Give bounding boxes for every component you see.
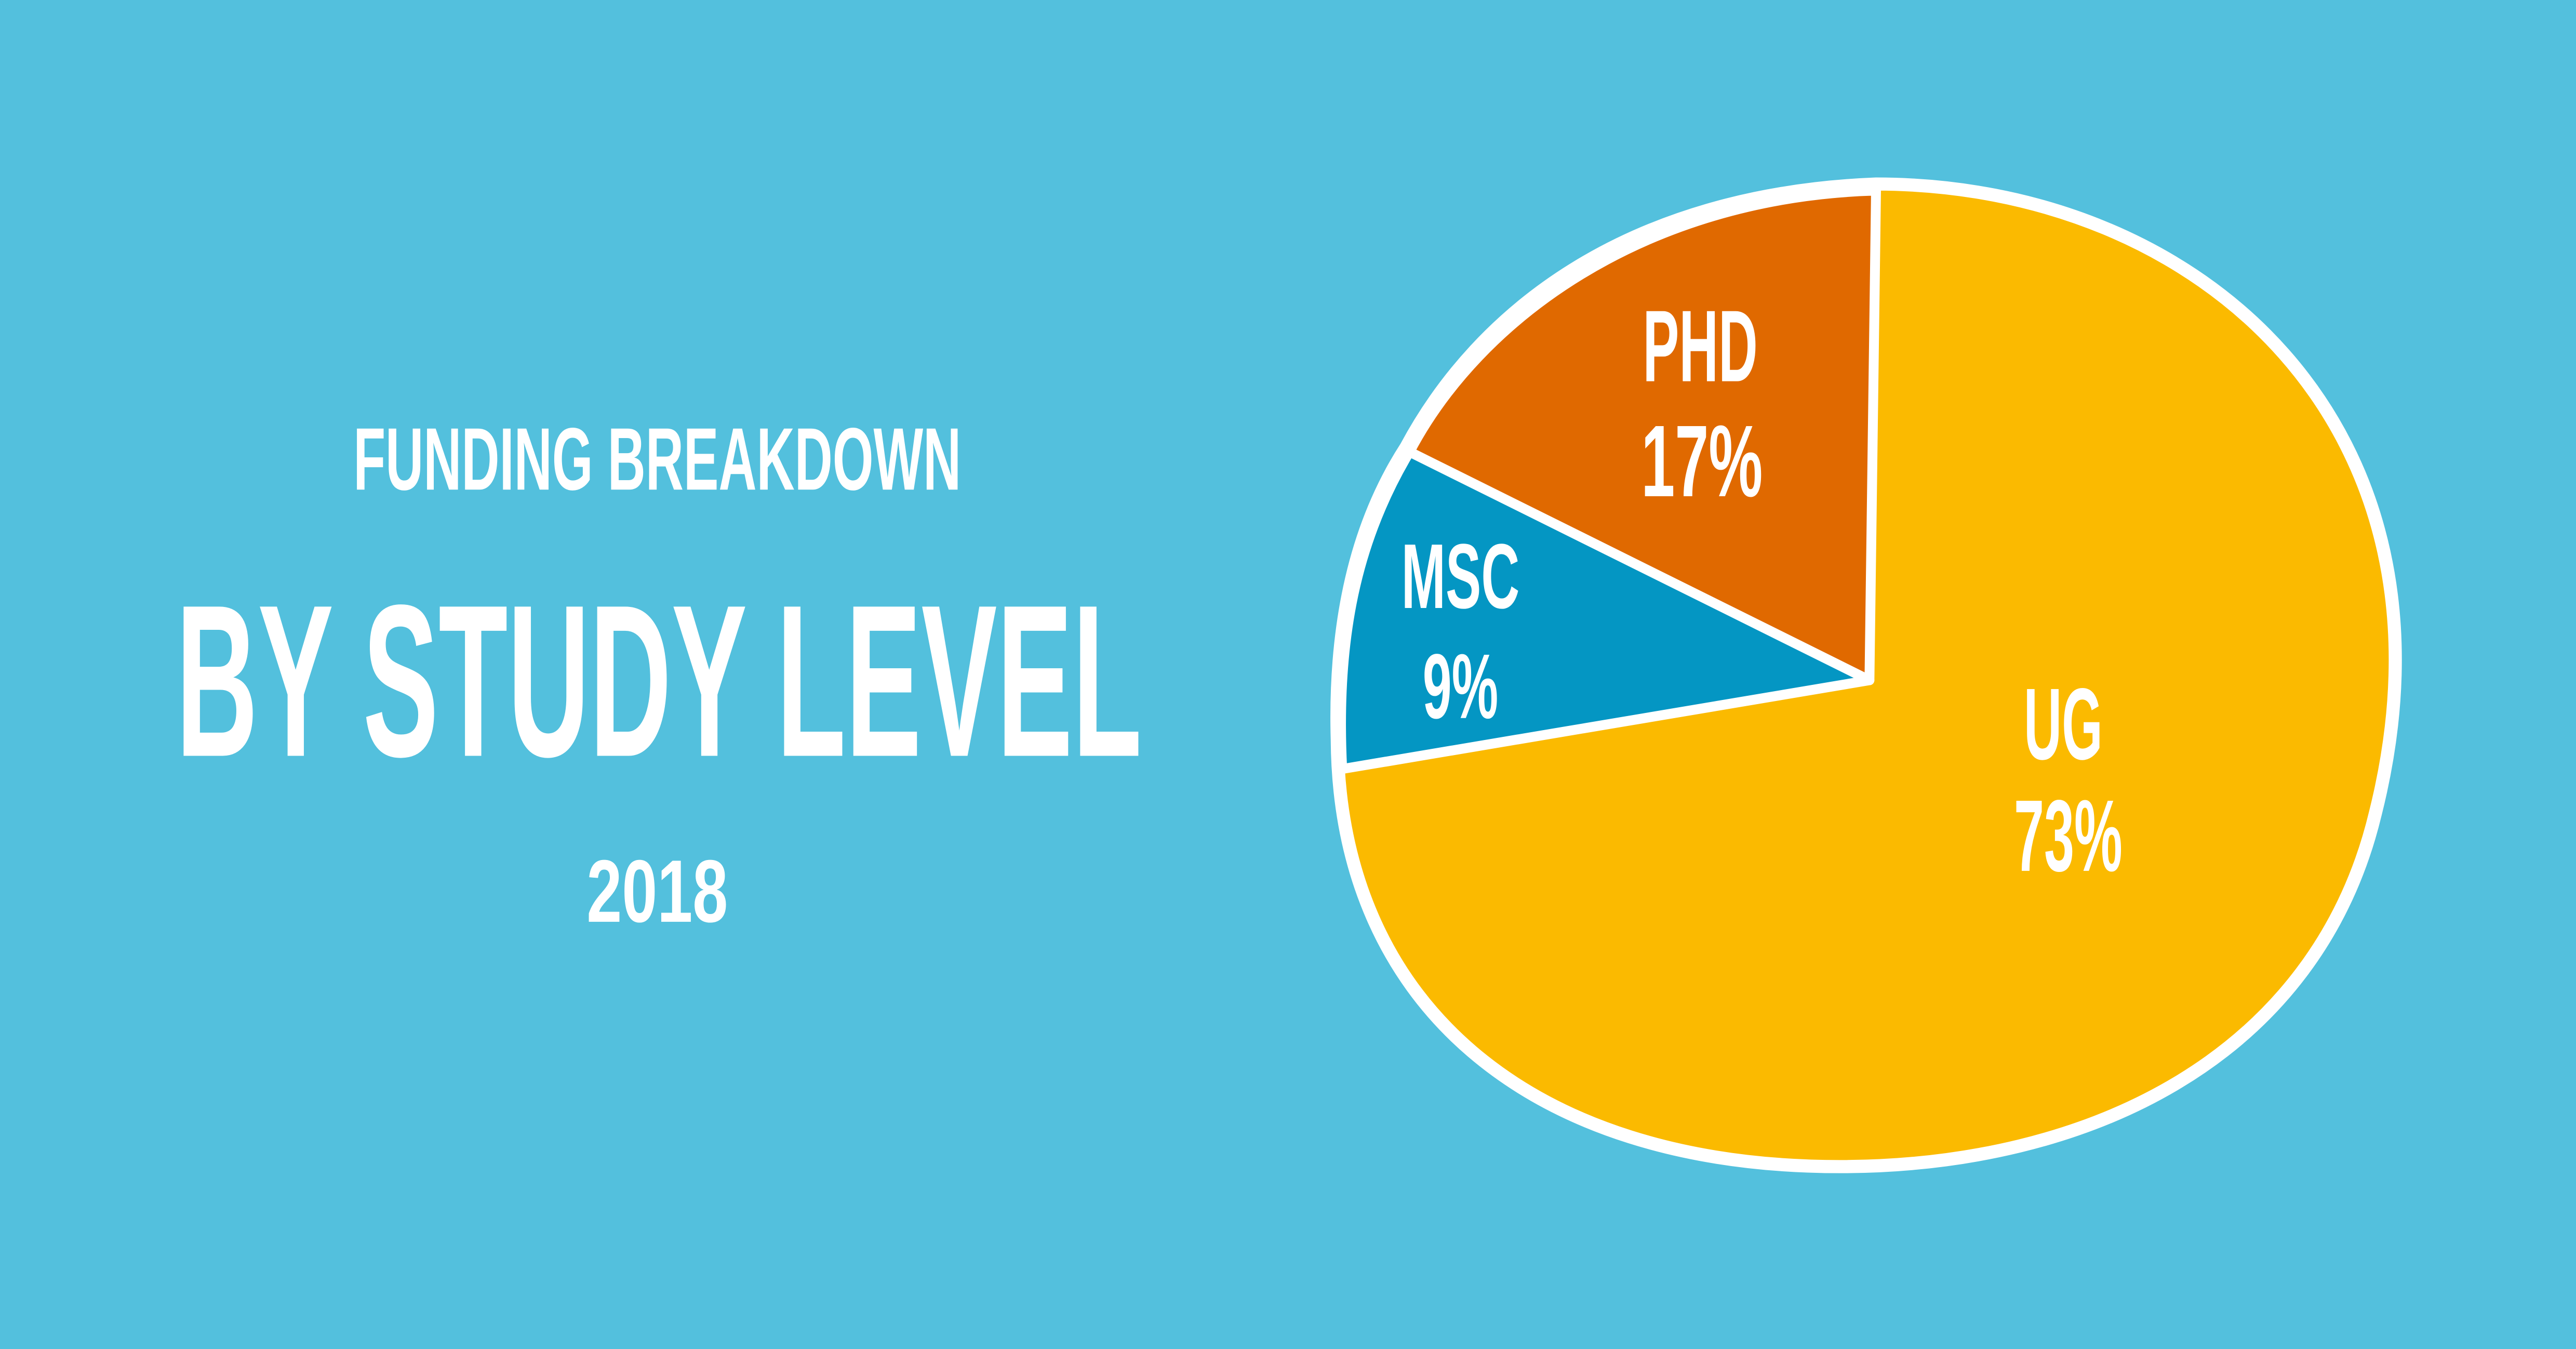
label: UG 73%: 73% [2014,779,2123,893]
label: PHD 17%: PHD [1643,289,1758,403]
pie chart [1337,184,2395,1167]
main title: by study level: BY STUDY LEVEL [176,560,1142,802]
slice: PHD [1409,191,1876,680]
slice: UG (yellow base blob) [1337,184,2395,1167]
label: PHD 17%: 17% [1641,404,1763,518]
slice: MSC [1341,452,1870,769]
label: MSC 9%: MSC [1402,525,1519,628]
label: MSC 9%: 9% [1423,635,1498,738]
label: PHD 17% [1641,289,1763,518]
label: UG 73% [2014,667,2123,893]
label: UG 73%: UG [2024,667,2103,781]
label: MSC 9% [1402,525,1519,738]
year: 2018 [586,842,728,941]
title block [176,409,1142,941]
subtitle: funding breakdown: FUNDING BREAKDOWN [353,409,961,509]
